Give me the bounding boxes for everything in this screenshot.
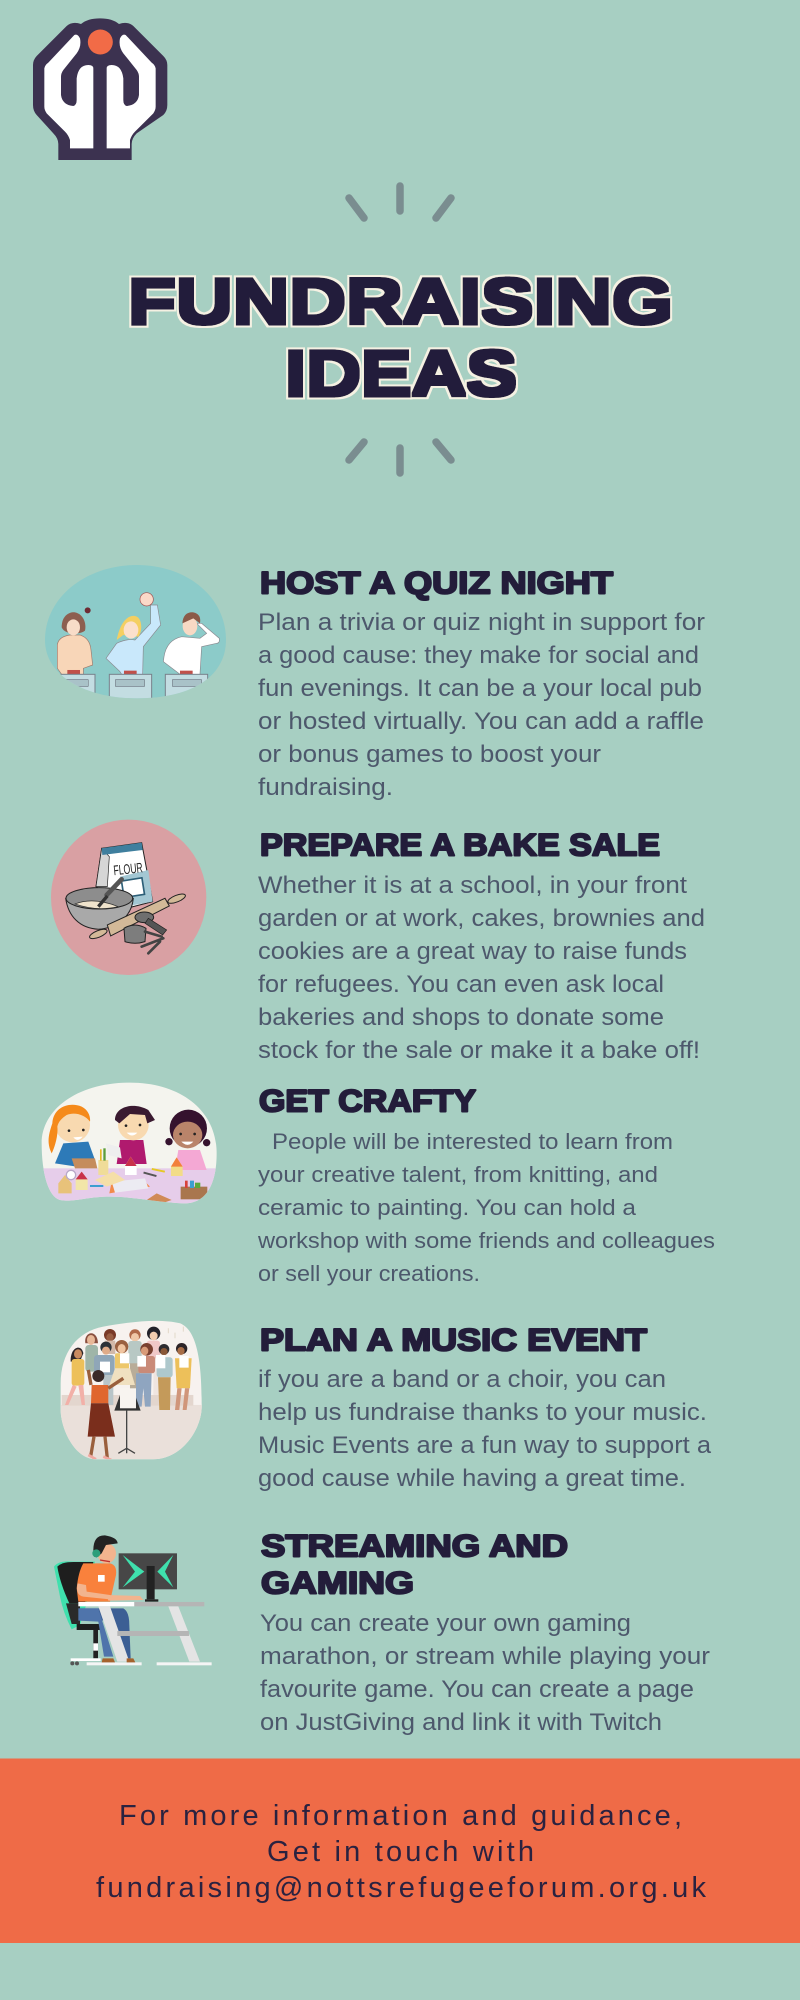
text: quiz night body: Plan a trivia or quiz night in support for <box>258 609 705 636</box>
panel: footer call to action <box>0 1758 800 1943</box>
panel: streaming and gaming <box>54 1528 710 1736</box>
text: quiz night body: or hosted virtually. You can add a raffle <box>258 708 704 735</box>
icon: choir with conductor <box>57 1321 207 1462</box>
panel: bake sale <box>51 820 705 1064</box>
text: quiz night body <box>258 609 705 801</box>
panel: get crafty <box>37 1082 715 1286</box>
text: streaming and gaming body: marathon, or stream while playing your <box>260 1643 710 1670</box>
text: streaming and gaming body: on JustGiving and link it with Twitch <box>260 1709 662 1736</box>
text: get crafty body <box>257 1129 715 1286</box>
heading: streaming and gaming: GAMING <box>261 1564 414 1600</box>
text: music event body: if you are a band or a choir, you can <box>258 1366 666 1393</box>
text: get crafty body: workshop with some friends and colleagues <box>257 1228 715 1253</box>
text: bake sale body: cookies are a great way to raise funds <box>258 938 687 965</box>
panel: music event <box>57 1321 711 1492</box>
heading: plan a music event: PLAN A MUSIC EVENT <box>260 1322 647 1358</box>
text: bake sale body <box>258 872 705 1064</box>
title <box>128 266 673 410</box>
text: bake sale body: bakeries and shops to donate some <box>258 1004 664 1031</box>
text: streaming and gaming body <box>260 1610 710 1736</box>
text: get crafty body: or sell your creations. <box>258 1261 480 1286</box>
text: quiz night body: or bonus games to boost your <box>258 741 601 768</box>
icon: logo of two hands holding a dot <box>33 18 167 160</box>
text: quiz night body: a good cause: they make for social and <box>258 642 699 669</box>
text: streaming and gaming body: favourite game. You can create a page <box>260 1676 694 1703</box>
text: music event body: good cause while having a great time. <box>258 1465 686 1492</box>
heading: prepare a bake sale: PREPARE A BAKE SALE <box>260 826 660 862</box>
heading: streaming and gaming <box>261 1528 568 1600</box>
text: contact details: For more information and guidance, <box>119 1800 682 1832</box>
heading: streaming and gaming: STREAMING AND <box>261 1528 568 1564</box>
text: contact details <box>96 1800 706 1904</box>
text: contact details: fundraising@nottsrefugeeforum.org.uk <box>96 1872 706 1904</box>
text: streaming and gaming body: You can create your own gaming <box>260 1610 631 1637</box>
panel: quiz night <box>45 564 705 801</box>
text: contact details: Get in touch with <box>267 1836 534 1868</box>
heading: get crafty: GET CRAFTY <box>259 1082 476 1118</box>
text: bake sale body: garden or at work, cakes, brownies and <box>258 905 705 932</box>
text: get crafty body: ceramic to painting. You can hold a <box>258 1195 637 1220</box>
title: FUNDRAISING <box>128 266 673 338</box>
icon: rays above title <box>349 186 451 218</box>
text: music event body: help us fundraise thanks to your music. <box>258 1399 707 1426</box>
icon: gamer at desk <box>54 1535 212 1665</box>
title: IDEAS <box>285 338 517 410</box>
icon: children making crafts <box>37 1083 220 1207</box>
text: quiz night body: fun evenings. It can be a your local pub <box>258 675 702 702</box>
heading: host a quiz night: HOST A QUIZ NIGHT <box>260 564 613 600</box>
icon: baking ingredients <box>51 820 206 975</box>
text: quiz night body: fundraising. <box>258 774 393 801</box>
text: get crafty body: People will be interested to learn from <box>272 1129 673 1154</box>
icon: rays below title <box>349 442 451 473</box>
text: music event body <box>258 1366 711 1492</box>
icon: baking ingredients: FLOUR <box>113 859 143 878</box>
text: bake sale body: for refugees. You can even ask local <box>258 971 664 998</box>
text: bake sale body: stock for the sale or make it a bake off! <box>258 1037 700 1064</box>
text: music event body: Music Events are a fun way to support a <box>258 1432 711 1459</box>
text: get crafty body: your creative talent, from knitting, and <box>258 1162 658 1187</box>
icon: quiz contestants <box>45 565 226 701</box>
text: bake sale body: Whether it is at a school, in your front <box>258 872 687 899</box>
